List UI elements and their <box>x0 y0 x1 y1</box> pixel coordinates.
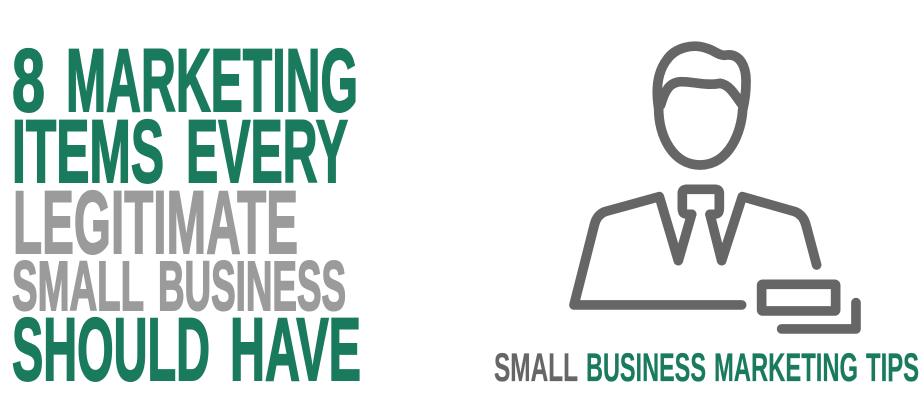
left jacket <box>574 197 742 305</box>
subtitle grey word: SMALL <box>494 346 578 390</box>
hairline <box>661 82 742 105</box>
desk card <box>762 284 836 311</box>
title line: Should Have: HAVE <box>230 299 361 399</box>
title line: Items Every: ITEMS <box>12 101 164 201</box>
title line: Legitimate: LEGITIMATE <box>13 172 298 272</box>
title line: Items Every: EVERY <box>186 101 348 201</box>
title line: 8 Marketing: 8 <box>12 30 45 130</box>
collar <box>682 189 719 214</box>
subtitle green words: BUSINESS <box>586 346 706 390</box>
title line: 8 Marketing <box>12 30 358 130</box>
subtitle green words <box>586 346 919 390</box>
title line: Small Business: SMALL <box>12 247 144 325</box>
icon: businessman at desk <box>574 46 856 329</box>
title <box>12 30 361 399</box>
title line: Should Have: SHOULD <box>12 299 210 399</box>
head and hair outline <box>657 46 746 165</box>
card shadow line <box>782 303 856 329</box>
title line: Small Business: BUSINESS <box>158 247 346 325</box>
right jacket <box>710 197 817 265</box>
title line: 8 Marketing: MARKETING <box>66 30 358 130</box>
subtitle: small business marketing tips <box>494 346 919 390</box>
